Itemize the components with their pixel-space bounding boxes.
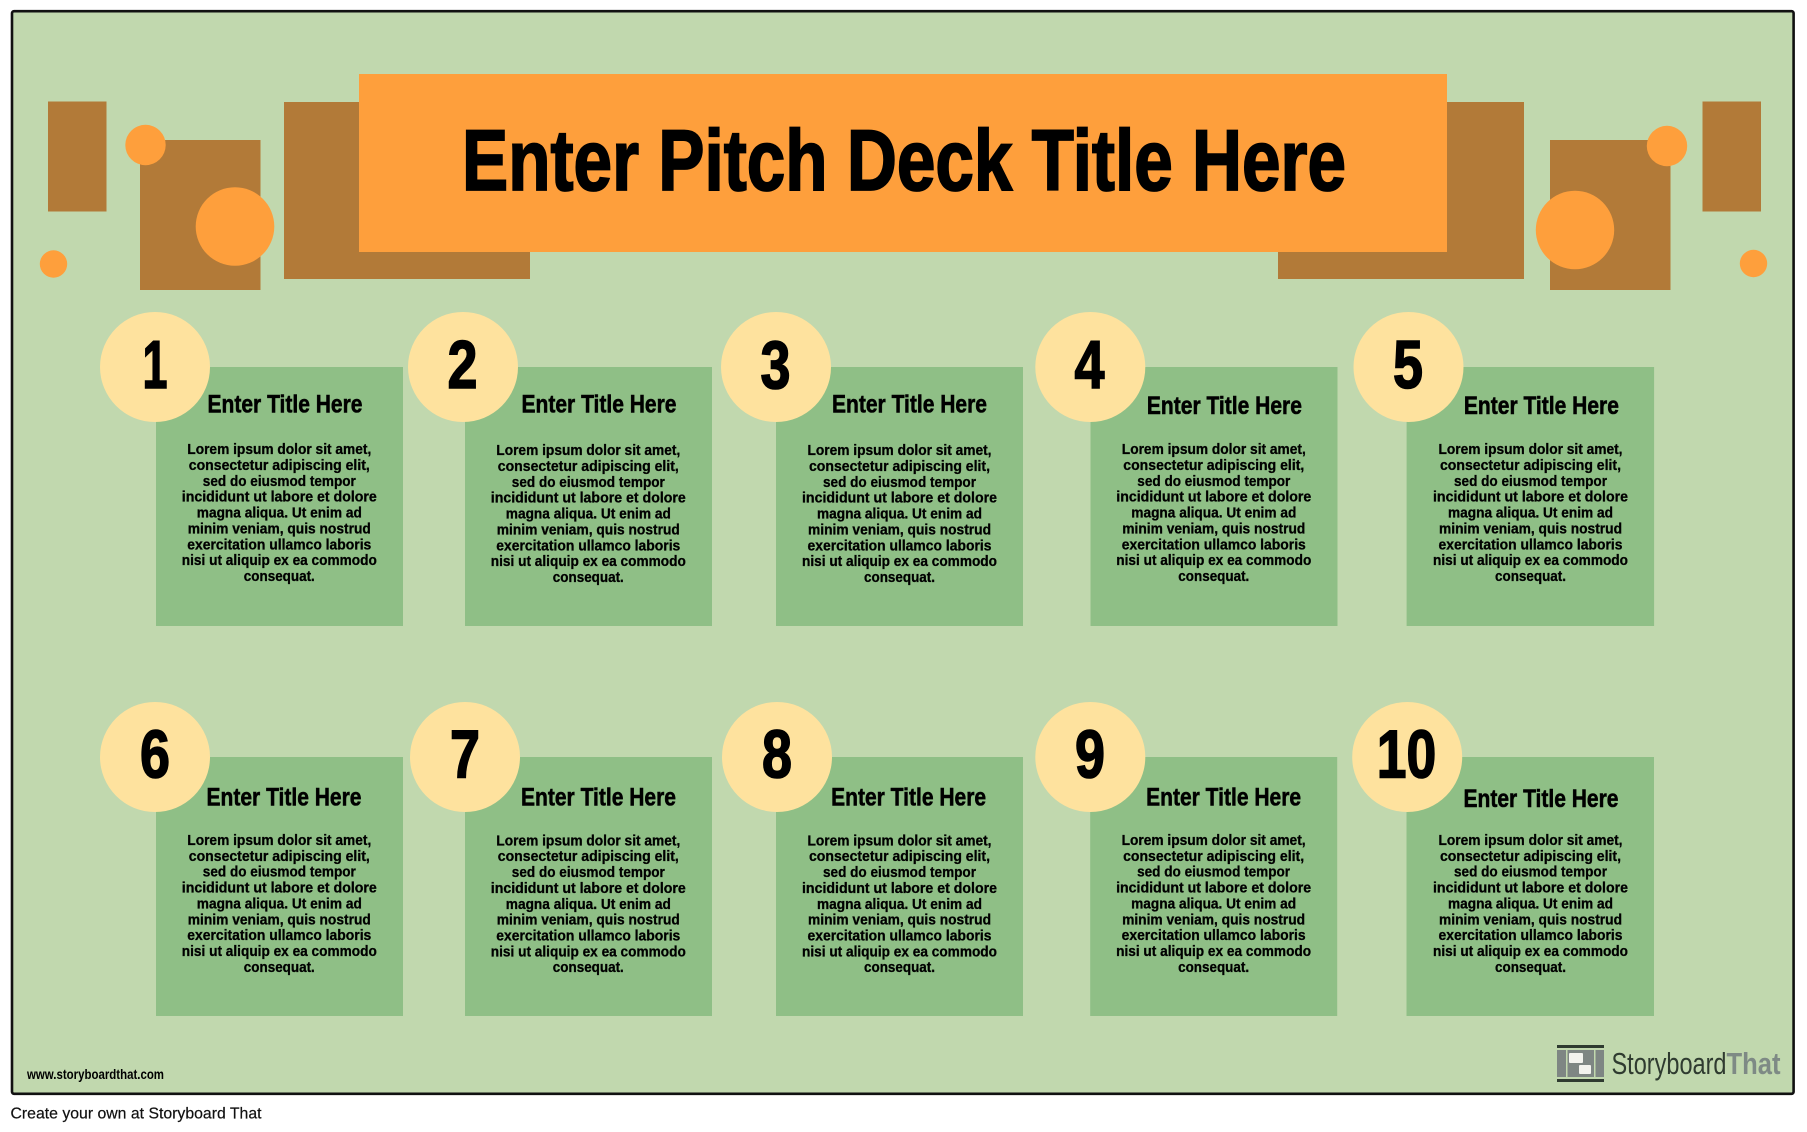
card 5: magna aliqua. Ut enim ad bbox=[1448, 505, 1613, 522]
card 1: Enter Title Here bbox=[208, 390, 363, 418]
card 9: consequat. bbox=[1178, 959, 1249, 976]
card 10: sed do eiusmod tempor bbox=[1454, 864, 1607, 881]
card 10: consectetur adipiscing elit, bbox=[1440, 848, 1621, 865]
card 2: exercitation ullamco laboris bbox=[496, 537, 680, 554]
card 2: nisi ut aliquip ex ea commodo bbox=[491, 553, 686, 570]
card 2: Enter Title Here bbox=[522, 390, 677, 418]
card 4: Lorem ipsum dolor sit amet, bbox=[1122, 441, 1306, 458]
card 9: minim veniam, quis nostrud bbox=[1122, 911, 1305, 928]
card 9: exercitation ullamco laboris bbox=[1122, 927, 1306, 944]
card 5: exercitation ullamco laboris bbox=[1438, 536, 1622, 553]
card 1: 1 bbox=[142, 327, 168, 403]
card 6: Lorem ipsum dolor sit amet, bbox=[187, 832, 371, 849]
card 1: minim veniam, quis nostrud bbox=[188, 520, 371, 537]
card 6: consequat. bbox=[244, 959, 315, 976]
card 10: 10 bbox=[1377, 716, 1436, 792]
card 10: minim veniam, quis nostrud bbox=[1439, 911, 1622, 928]
card 3: incididunt ut labore et dolore bbox=[802, 490, 997, 507]
card 10: Enter Title Here bbox=[1464, 785, 1619, 813]
card 3: Enter Title Here bbox=[832, 390, 987, 418]
card 8: Lorem ipsum dolor sit amet, bbox=[808, 832, 992, 849]
card 2: Lorem ipsum dolor sit amet, bbox=[496, 442, 680, 459]
card 9: consectetur adipiscing elit, bbox=[1123, 848, 1304, 865]
card 4: 4 bbox=[1074, 327, 1105, 403]
card 4: nisi ut aliquip ex ea commodo bbox=[1116, 552, 1311, 569]
card 9: incididunt ut labore et dolore bbox=[1116, 880, 1311, 897]
card 8: consequat. bbox=[864, 959, 935, 976]
card 5: incididunt ut labore et dolore bbox=[1433, 489, 1628, 506]
card 1: magna aliqua. Ut enim ad bbox=[197, 505, 362, 522]
card 8: nisi ut aliquip ex ea commodo bbox=[802, 943, 997, 960]
card 6: nisi ut aliquip ex ea commodo bbox=[182, 943, 377, 960]
card 6: minim veniam, quis nostrud bbox=[188, 911, 371, 928]
card 2: consectetur adipiscing elit, bbox=[498, 458, 679, 475]
card 7: 7 bbox=[450, 716, 480, 792]
card 3: nisi ut aliquip ex ea commodo bbox=[802, 553, 997, 570]
card 9: sed do eiusmod tempor bbox=[1137, 864, 1290, 881]
card 3: 3 bbox=[760, 327, 790, 403]
card 7: nisi ut aliquip ex ea commodo bbox=[491, 943, 686, 960]
card 4: exercitation ullamco laboris bbox=[1122, 536, 1306, 553]
footer credit: Create your own at Storyboard That bbox=[10, 1106, 262, 1122]
card 6: consectetur adipiscing elit, bbox=[189, 848, 370, 865]
card 9: Lorem ipsum dolor sit amet, bbox=[1122, 832, 1306, 849]
card 4: sed do eiusmod tempor bbox=[1137, 473, 1290, 490]
storyboard that wordmark: Storyboard bbox=[1612, 1046, 1726, 1081]
card 6 bbox=[100, 702, 403, 1016]
card 6: 6 bbox=[140, 716, 170, 792]
card 8 bbox=[722, 702, 1023, 1016]
card 3: Lorem ipsum dolor sit amet, bbox=[808, 442, 992, 459]
card 9 bbox=[1035, 702, 1337, 1016]
card 10: nisi ut aliquip ex ea commodo bbox=[1433, 943, 1628, 960]
card 1: nisi ut aliquip ex ea commodo bbox=[182, 552, 377, 569]
card 5: 5 bbox=[1393, 327, 1423, 403]
card 3: sed do eiusmod tempor bbox=[823, 474, 976, 491]
card 7: incididunt ut labore et dolore bbox=[491, 880, 686, 897]
card 9: Enter Title Here bbox=[1146, 784, 1301, 812]
card 4: consequat. bbox=[1178, 568, 1249, 585]
card 1: consequat. bbox=[244, 568, 315, 585]
card 1: incididunt ut labore et dolore bbox=[182, 489, 377, 506]
left decorative shapes bbox=[40, 102, 530, 290]
card 8: exercitation ullamco laboris bbox=[808, 928, 992, 945]
card 1: sed do eiusmod tempor bbox=[203, 473, 356, 490]
card 5: consequat. bbox=[1495, 568, 1566, 585]
card 3: consequat. bbox=[864, 569, 935, 586]
card 7: exercitation ullamco laboris bbox=[496, 928, 680, 945]
card 1: consectetur adipiscing elit, bbox=[189, 457, 370, 474]
card 2: sed do eiusmod tempor bbox=[512, 474, 665, 491]
website url: www.storyboardthat.com bbox=[26, 1066, 164, 1082]
card 5: Enter Title Here bbox=[1464, 392, 1619, 420]
card 1: exercitation ullamco laboris bbox=[187, 536, 371, 553]
card 2: incididunt ut labore et dolore bbox=[491, 490, 686, 507]
card 7: sed do eiusmod tempor bbox=[512, 864, 665, 881]
card 9: 9 bbox=[1075, 716, 1105, 792]
card 4: incididunt ut labore et dolore bbox=[1116, 489, 1311, 506]
card 10: consequat. bbox=[1495, 959, 1566, 976]
card 2: 2 bbox=[448, 327, 478, 403]
card 3: exercitation ullamco laboris bbox=[808, 537, 992, 554]
card 5 bbox=[1354, 312, 1654, 626]
card 5: Lorem ipsum dolor sit amet, bbox=[1438, 441, 1622, 458]
card 3: magna aliqua. Ut enim ad bbox=[817, 506, 982, 523]
card 2: magna aliqua. Ut enim ad bbox=[506, 506, 671, 523]
card 6: incididunt ut labore et dolore bbox=[182, 880, 377, 897]
icon: storyboard logo bbox=[1557, 1045, 1604, 1082]
card 4 bbox=[1035, 312, 1338, 626]
card 6: magna aliqua. Ut enim ad bbox=[197, 895, 362, 912]
card 2: consequat. bbox=[553, 569, 624, 586]
card 6: exercitation ullamco laboris bbox=[187, 927, 371, 944]
card 8: consectetur adipiscing elit, bbox=[809, 848, 990, 865]
card 3 bbox=[721, 312, 1023, 626]
card 1: Lorem ipsum dolor sit amet, bbox=[187, 441, 371, 458]
card 10: exercitation ullamco laboris bbox=[1438, 927, 1622, 944]
card 7: consequat. bbox=[553, 959, 624, 976]
card 5: minim veniam, quis nostrud bbox=[1439, 520, 1622, 537]
card 7: consectetur adipiscing elit, bbox=[498, 848, 679, 865]
card 3: minim veniam, quis nostrud bbox=[808, 521, 991, 538]
card 7: minim veniam, quis nostrud bbox=[497, 912, 680, 929]
right decorative shapes bbox=[1278, 102, 1767, 290]
card 7 bbox=[410, 702, 712, 1016]
card 8: sed do eiusmod tempor bbox=[823, 864, 976, 881]
card 10 bbox=[1352, 702, 1654, 1016]
card 3: consectetur adipiscing elit, bbox=[809, 458, 990, 475]
card 4: magna aliqua. Ut enim ad bbox=[1131, 505, 1296, 522]
card 4: consectetur adipiscing elit, bbox=[1123, 457, 1304, 474]
card 4: minim veniam, quis nostrud bbox=[1122, 520, 1305, 537]
card 2: minim veniam, quis nostrud bbox=[497, 521, 680, 538]
title banner bbox=[359, 74, 1447, 252]
card 10: Lorem ipsum dolor sit amet, bbox=[1438, 832, 1622, 849]
card 8: magna aliqua. Ut enim ad bbox=[817, 896, 982, 913]
card 6: Enter Title Here bbox=[206, 784, 362, 812]
card 10: magna aliqua. Ut enim ad bbox=[1448, 895, 1613, 912]
title banner: Enter Pitch Deck Title Here bbox=[462, 113, 1346, 209]
storyboard that wordmark bold part: That bbox=[1726, 1046, 1780, 1081]
card 10: incididunt ut labore et dolore bbox=[1433, 880, 1628, 897]
card 4: Enter Title Here bbox=[1147, 392, 1302, 420]
card 8: Enter Title Here bbox=[831, 784, 986, 812]
card 8: minim veniam, quis nostrud bbox=[808, 912, 991, 929]
card 7: Lorem ipsum dolor sit amet, bbox=[496, 832, 680, 849]
card 5: sed do eiusmod tempor bbox=[1454, 473, 1607, 490]
card 7: magna aliqua. Ut enim ad bbox=[506, 896, 671, 913]
card 9: magna aliqua. Ut enim ad bbox=[1131, 895, 1296, 912]
card 2 bbox=[408, 312, 712, 626]
card 7: Enter Title Here bbox=[521, 784, 676, 812]
card 8: 8 bbox=[762, 716, 792, 792]
card 8: incididunt ut labore et dolore bbox=[802, 880, 997, 897]
card 6: sed do eiusmod tempor bbox=[203, 864, 356, 881]
card 5: nisi ut aliquip ex ea commodo bbox=[1433, 552, 1628, 569]
card 1 bbox=[100, 312, 403, 626]
card 5: consectetur adipiscing elit, bbox=[1440, 457, 1621, 474]
card 9: nisi ut aliquip ex ea commodo bbox=[1116, 943, 1311, 960]
